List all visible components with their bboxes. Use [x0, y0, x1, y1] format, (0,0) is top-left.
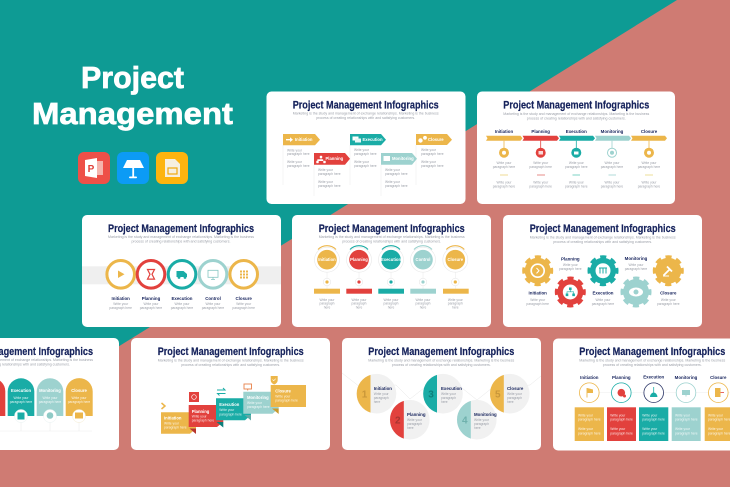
labels and text: Write your — [236, 302, 252, 306]
labels and text: paragraph here — [171, 306, 193, 310]
arrow: Closure: Closure — [428, 137, 444, 142]
heading: Project Management Infographics — [158, 346, 304, 358]
arrow band — [486, 136, 667, 141]
step: Monitoring — [243, 392, 279, 414]
column: Planning — [607, 375, 636, 441]
labels and text: Planning — [561, 256, 580, 261]
subtitle: Marketing is the study and management of exchange relationships. Marketing is the business — [158, 358, 304, 362]
column: Initiation: paragraph here — [578, 431, 601, 435]
arch: Closure: Closure — [71, 388, 87, 393]
step 4: Monitoring — [457, 400, 497, 440]
ring: Initiation — [107, 260, 134, 288]
step 3: Execution: Execution — [441, 386, 462, 391]
gear: Initiation — [524, 257, 551, 284]
text blocks: Write your — [497, 180, 512, 184]
labels and text: Closure — [236, 296, 252, 301]
text blocks: Write your — [385, 168, 401, 172]
column: Planning: paragraph here — [610, 418, 633, 422]
step 4: Monitoring: Monitoring — [474, 412, 497, 417]
step 1: Initiation: Write your — [374, 392, 390, 396]
subtitle: process of creating relationships with and satisfying customers. — [392, 363, 491, 367]
panel: filled circles and bars slide — [292, 215, 491, 327]
labels and text: paragraph here — [625, 267, 647, 271]
subtitle — [503, 112, 649, 120]
arch: Monitoring: paragraph here — [39, 400, 61, 404]
step 1: Initiation: Initiation — [374, 386, 392, 391]
panel: flag arrows slide — [266, 92, 466, 204]
labels and text: Write your — [175, 302, 190, 306]
column: Planning: Write your — [610, 414, 626, 418]
step 3: Execution — [423, 374, 463, 414]
text blocks: paragraph here — [354, 152, 377, 156]
hero title: Project — [81, 60, 184, 95]
text blocks: paragraph here — [287, 164, 310, 168]
icon: target square — [189, 392, 199, 402]
subtitle — [293, 112, 439, 120]
step: Planning — [189, 405, 223, 428]
icon: Google Slides — [156, 152, 188, 184]
step: Control: Write your — [416, 298, 431, 302]
text blocks: paragraph here — [601, 184, 623, 188]
panel: outlined icons with cards slide (cropped right) — [553, 338, 730, 450]
column: Execution: Write your — [642, 414, 658, 418]
subtitle — [0, 358, 93, 366]
panel: staircase slide — [131, 338, 330, 450]
arch: Closure: Write your — [72, 396, 87, 400]
arrow: Initiation — [283, 134, 320, 145]
column: Execution: paragraph here — [642, 431, 665, 435]
hero title: Management — [32, 96, 233, 131]
heading: Project Management Infographics — [368, 346, 514, 358]
step 5: Closure: paragraph — [507, 396, 522, 400]
text blocks: Write your — [421, 148, 437, 152]
subtitle: process of creating relationships with and satisfying customers. — [527, 116, 626, 120]
text blocks: paragraph here — [318, 172, 341, 176]
labels and text: Write your — [113, 302, 129, 306]
arch: Monitoring: Write your — [43, 396, 58, 400]
column: Execution — [639, 374, 668, 441]
step 3: Execution: here — [441, 400, 448, 404]
column: Monitoring — [672, 375, 701, 441]
text blocks: paragraph here — [529, 165, 552, 169]
text blocks: paragraph here — [421, 164, 444, 168]
labels and text: Execution — [593, 290, 614, 295]
labels and text: paragraph here — [657, 302, 680, 306]
column: Monitoring: paragraph here — [675, 418, 698, 422]
stage labels: Monitoring — [601, 129, 624, 134]
step 5: Closure: 5 — [495, 390, 501, 400]
labels and text: Closure — [660, 290, 677, 295]
step: Closure: paragraph — [448, 302, 463, 306]
labels and text: Write your — [661, 298, 677, 302]
text blocks: Write your — [642, 161, 657, 165]
heading: Project Management Infographics — [293, 100, 439, 112]
labels and text: Write your — [206, 302, 221, 306]
text blocks: paragraph here — [493, 184, 515, 188]
step: Execution — [216, 398, 251, 420]
text blocks: Write your — [287, 160, 303, 164]
text blocks: paragraph here — [601, 165, 623, 169]
step 3: Execution: 3 — [428, 390, 434, 400]
column: Closure — [705, 375, 730, 441]
step: Planning: Write your — [352, 298, 367, 302]
stage labels: Initiation — [495, 129, 513, 134]
icon: shield — [271, 376, 278, 384]
column: Planning: paragraph here — [610, 431, 633, 435]
text blocks: Write your — [569, 161, 585, 165]
step: Monitoring: paragraph here — [247, 405, 270, 409]
text blocks — [493, 161, 660, 188]
step 4: Monitoring: Write your — [474, 418, 490, 422]
labels and text: Write your — [596, 298, 611, 302]
labels and text: Monitoring — [625, 256, 648, 261]
step: Closure: here — [452, 305, 459, 309]
text blocks — [287, 148, 444, 188]
column: Execution: Write your — [642, 427, 658, 431]
column: Initiation: paragraph here — [578, 418, 601, 422]
subtitle: Marketing is the study and management of exchange relationships. Marketing is the business — [579, 358, 725, 362]
column: Planning: Planning — [612, 375, 631, 380]
column: Closure: Write your — [708, 427, 724, 431]
step: Control: here — [420, 305, 426, 309]
arch: Monitoring — [37, 378, 63, 431]
arch: Execution — [8, 378, 34, 431]
labels and text: Write your — [563, 263, 579, 267]
step: Planning: Planning — [192, 409, 210, 414]
column: Closure: Write your — [708, 414, 724, 418]
subtitle: process of creating relationships with and satisfying customers. — [603, 363, 702, 367]
step: Execution — [378, 246, 404, 309]
step: Execution: here — [388, 305, 394, 309]
step 2: Planning: 2 — [395, 416, 401, 426]
column: Closure: paragraph here — [708, 431, 730, 435]
arch: Monitoring: Monitoring — [39, 388, 61, 393]
step 2: Planning: Write your — [407, 418, 423, 422]
heading: Project Management Infographics — [319, 223, 465, 235]
labels and text — [109, 296, 255, 310]
subtitle: process of creating relationships with and satisfying customers. — [132, 240, 230, 244]
arrow: Monitoring — [381, 153, 417, 165]
step: Initiation: paragraph — [319, 302, 335, 306]
subtitle: Marketing is the study and management of exchange relationships. Marketing is the business — [503, 112, 649, 116]
step 2: Planning — [390, 400, 430, 440]
text blocks: paragraph here — [565, 184, 588, 188]
ring: Control — [199, 260, 227, 288]
step: Initiation: Write your — [164, 422, 180, 426]
step: Closure: Write your — [275, 395, 291, 399]
stage labels: Planning — [531, 129, 550, 134]
step: Planning: Planning — [350, 257, 368, 262]
stage labels — [495, 129, 658, 134]
ring: Closure — [230, 260, 258, 288]
labels and text: paragraph here — [202, 306, 224, 310]
column: Monitoring: paragraph here — [675, 431, 698, 435]
text blocks: paragraph here — [638, 184, 660, 188]
text blocks: paragraph here — [565, 165, 588, 169]
subtitle — [319, 235, 465, 244]
arrow: Planning — [314, 153, 350, 165]
step 5: Closure: Closure — [507, 386, 524, 391]
arrow: Execution: Execution — [362, 137, 383, 142]
step 2: Planning: here — [407, 426, 414, 430]
subtitle — [368, 358, 514, 367]
text blocks: Write your — [642, 180, 657, 184]
step: Execution: Execution — [219, 402, 240, 407]
step 4: Monitoring: here — [474, 426, 481, 430]
step: Initiation — [314, 246, 340, 309]
labels and text: paragraph here — [109, 306, 132, 310]
labels and text: paragraph here — [559, 267, 582, 271]
step 1: Initiation: paragraph — [374, 396, 389, 400]
step: Control: paragraph — [415, 302, 431, 306]
text blocks: paragraph here — [385, 184, 408, 188]
step: Closure: Closure — [448, 257, 464, 262]
text blocks: Write your — [421, 160, 437, 164]
text blocks: paragraph here — [354, 164, 377, 168]
gear: Closure — [655, 257, 682, 284]
step: Control — [410, 246, 436, 309]
labels and text: paragraph here — [140, 306, 162, 310]
step: Initiation: Initiation — [164, 416, 182, 420]
arch: Closure — [66, 378, 93, 431]
step 5: Closure — [490, 374, 530, 414]
step: Execution: Write your — [384, 298, 399, 302]
column: Execution: paragraph here — [642, 418, 665, 422]
text blocks: paragraph here — [318, 184, 341, 188]
arch: Execution: Execution — [11, 388, 31, 393]
icon: Keynote — [117, 152, 149, 184]
step: Planning — [346, 246, 372, 309]
labels and text: Planning — [142, 296, 161, 301]
column: Initiation: Write your — [578, 427, 594, 431]
subtitle — [530, 235, 676, 244]
step: Planning: here — [356, 305, 362, 309]
step 4: Monitoring: 4 — [462, 416, 468, 426]
subtitle — [158, 358, 304, 367]
step 3: Execution: paragraph — [441, 396, 456, 400]
column: Monitoring: Write your — [675, 427, 691, 431]
subtitle: Marketing is the study and management of exchange relationships. Marketing is the business — [368, 358, 514, 362]
text blocks: Write your — [318, 168, 334, 172]
step: Closure: paragraph here — [275, 399, 298, 403]
arrow: Closure — [416, 134, 452, 145]
column: Monitoring: Monitoring — [675, 375, 698, 380]
labels and text — [526, 256, 680, 306]
labels and text: Execution — [172, 296, 193, 301]
text blocks: paragraph here — [287, 152, 310, 156]
text blocks: Write your — [605, 180, 620, 184]
arch: Planning — [0, 378, 5, 416]
labels and text: paragraph here — [592, 302, 614, 306]
hero title — [32, 60, 233, 131]
gear: Monitoring — [622, 278, 650, 306]
text blocks: Write your — [569, 180, 585, 184]
text blocks: paragraph here — [493, 165, 515, 169]
text blocks: Write your — [385, 180, 401, 184]
panel: ring circles slide — [82, 215, 281, 327]
panel: gears slide — [503, 215, 702, 327]
step: Initiation: Initiation — [318, 257, 336, 262]
text blocks: Write your — [497, 161, 512, 165]
column: Initiation: Write your — [578, 414, 594, 418]
subtitle: Marketing is the study and management of exchange relationships. Marketing is the business — [293, 112, 439, 116]
text blocks: Write your — [318, 180, 334, 184]
heading: Project Management Infographics — [503, 100, 649, 112]
step: Initiation: Write your — [320, 298, 335, 302]
arrow: Initiation: Initiation — [295, 137, 313, 142]
subtitle — [579, 358, 725, 367]
text blocks: Write your — [354, 160, 370, 164]
column: Closure: Closure — [710, 375, 727, 380]
labels and text: Initiation — [112, 296, 130, 301]
step: Closure: Write your — [448, 298, 464, 302]
subtitle: Marketing is the study and management of exchange relationships. Marketing is the business — [530, 235, 676, 239]
subtitle: process of creating relationships with and satisfying customers. — [553, 240, 652, 244]
arch: Closure: paragraph here — [68, 400, 90, 404]
step 3: Execution: Write your — [441, 392, 457, 396]
step 2: Planning: paragraph — [407, 422, 422, 426]
step: Closure — [443, 246, 469, 309]
step: Execution: paragraph here — [219, 412, 242, 416]
step: Planning: Write your — [192, 414, 208, 418]
text blocks: paragraph here — [385, 172, 408, 176]
subtitle: process of creating relationships with and satisfying customers. — [342, 240, 441, 244]
labels and text: Write your — [530, 298, 546, 302]
text blocks: Write your — [287, 148, 303, 152]
subtitle — [108, 235, 254, 244]
subtitle: process of creating relationships with and satisfying customers. — [181, 363, 280, 367]
step: Initiation: paragraph here — [164, 425, 187, 429]
labels and text: Control — [205, 296, 221, 301]
icon: swap arrows — [217, 388, 226, 396]
arrow: Planning: Planning — [326, 156, 344, 161]
icon: PowerPoint — [78, 152, 110, 184]
arch: Execution: Write your — [14, 396, 29, 400]
column: Planning: Write your — [610, 427, 626, 431]
ring: Planning — [137, 260, 165, 288]
step: Planning: paragraph here — [192, 419, 214, 423]
step: Closure: Closure — [275, 388, 292, 394]
text blocks: paragraph here — [529, 184, 552, 188]
labels and text: paragraph here — [232, 306, 255, 310]
step 5: Closure: Write your — [507, 392, 523, 396]
heading: Project Management Infographics — [530, 223, 676, 235]
step: Execution: Write your — [219, 408, 235, 412]
arrow: Monitoring: Monitoring — [392, 156, 414, 161]
gear: Planning — [557, 278, 584, 306]
step: Initiation — [161, 412, 196, 434]
step: Execution: Execution — [381, 257, 401, 262]
column: Monitoring: Write your — [675, 414, 691, 418]
stage labels: Closure — [641, 129, 658, 134]
heading: Project Management Infographics — [108, 223, 254, 235]
labels and text: Write your — [144, 302, 159, 306]
ring: Execution — [168, 260, 196, 288]
gear: Execution — [590, 257, 616, 284]
column: Closure: paragraph here — [708, 418, 730, 422]
labels and text: paragraph here — [526, 302, 549, 306]
stage labels: Execution — [566, 129, 587, 134]
step: Monitoring: Monitoring — [247, 395, 269, 400]
arrow: Execution — [350, 134, 386, 145]
step: Monitoring: Write your — [247, 401, 263, 405]
step: Initiation: here — [324, 305, 330, 309]
step: Execution: paragraph — [383, 302, 399, 306]
icon: monitor — [244, 384, 252, 390]
text blocks: Write your — [354, 148, 370, 152]
subtitle: Marketing is the study and management of exchange relationships. Marketing is the business — [319, 235, 465, 239]
labels and text: Initiation — [529, 290, 547, 295]
subtitle: process of creating relationships with and satisfying customers. — [316, 116, 415, 120]
icon: PowerPoint: P — [88, 164, 95, 175]
step 1: Initiation: here — [374, 400, 380, 404]
text blocks: Write your — [533, 161, 549, 165]
column: Initiation: Initiation — [580, 375, 599, 380]
step: Closure — [271, 385, 306, 407]
column: Initiation — [575, 375, 604, 441]
step 5: Closure: here — [507, 400, 514, 404]
panel: arches slide (cropped left) — [0, 338, 119, 450]
step 1: Initiation — [357, 374, 396, 414]
arch: Execution: paragraph here — [10, 400, 32, 404]
text blocks: paragraph here — [421, 152, 444, 156]
panel: timeline slide — [477, 92, 675, 204]
stage markers — [499, 141, 654, 158]
step: Planning: paragraph — [351, 302, 367, 306]
labels and text: Write your — [629, 263, 644, 267]
step 1: Initiation: 1 — [362, 390, 368, 400]
step 4: Monitoring: paragraph — [474, 422, 489, 426]
text blocks: Write your — [605, 161, 620, 165]
text blocks: Write your — [533, 180, 549, 184]
step 2: Planning: Planning — [407, 412, 426, 417]
step: Control: Control — [416, 257, 430, 262]
column: Execution: Execution — [643, 374, 665, 380]
subtitle: Marketing is the study and management of exchange relationships. Marketing is the business — [108, 235, 254, 239]
text blocks: paragraph here — [638, 165, 660, 169]
panel: numbered circles slide — [342, 338, 541, 450]
icon: chevron — [162, 403, 165, 409]
